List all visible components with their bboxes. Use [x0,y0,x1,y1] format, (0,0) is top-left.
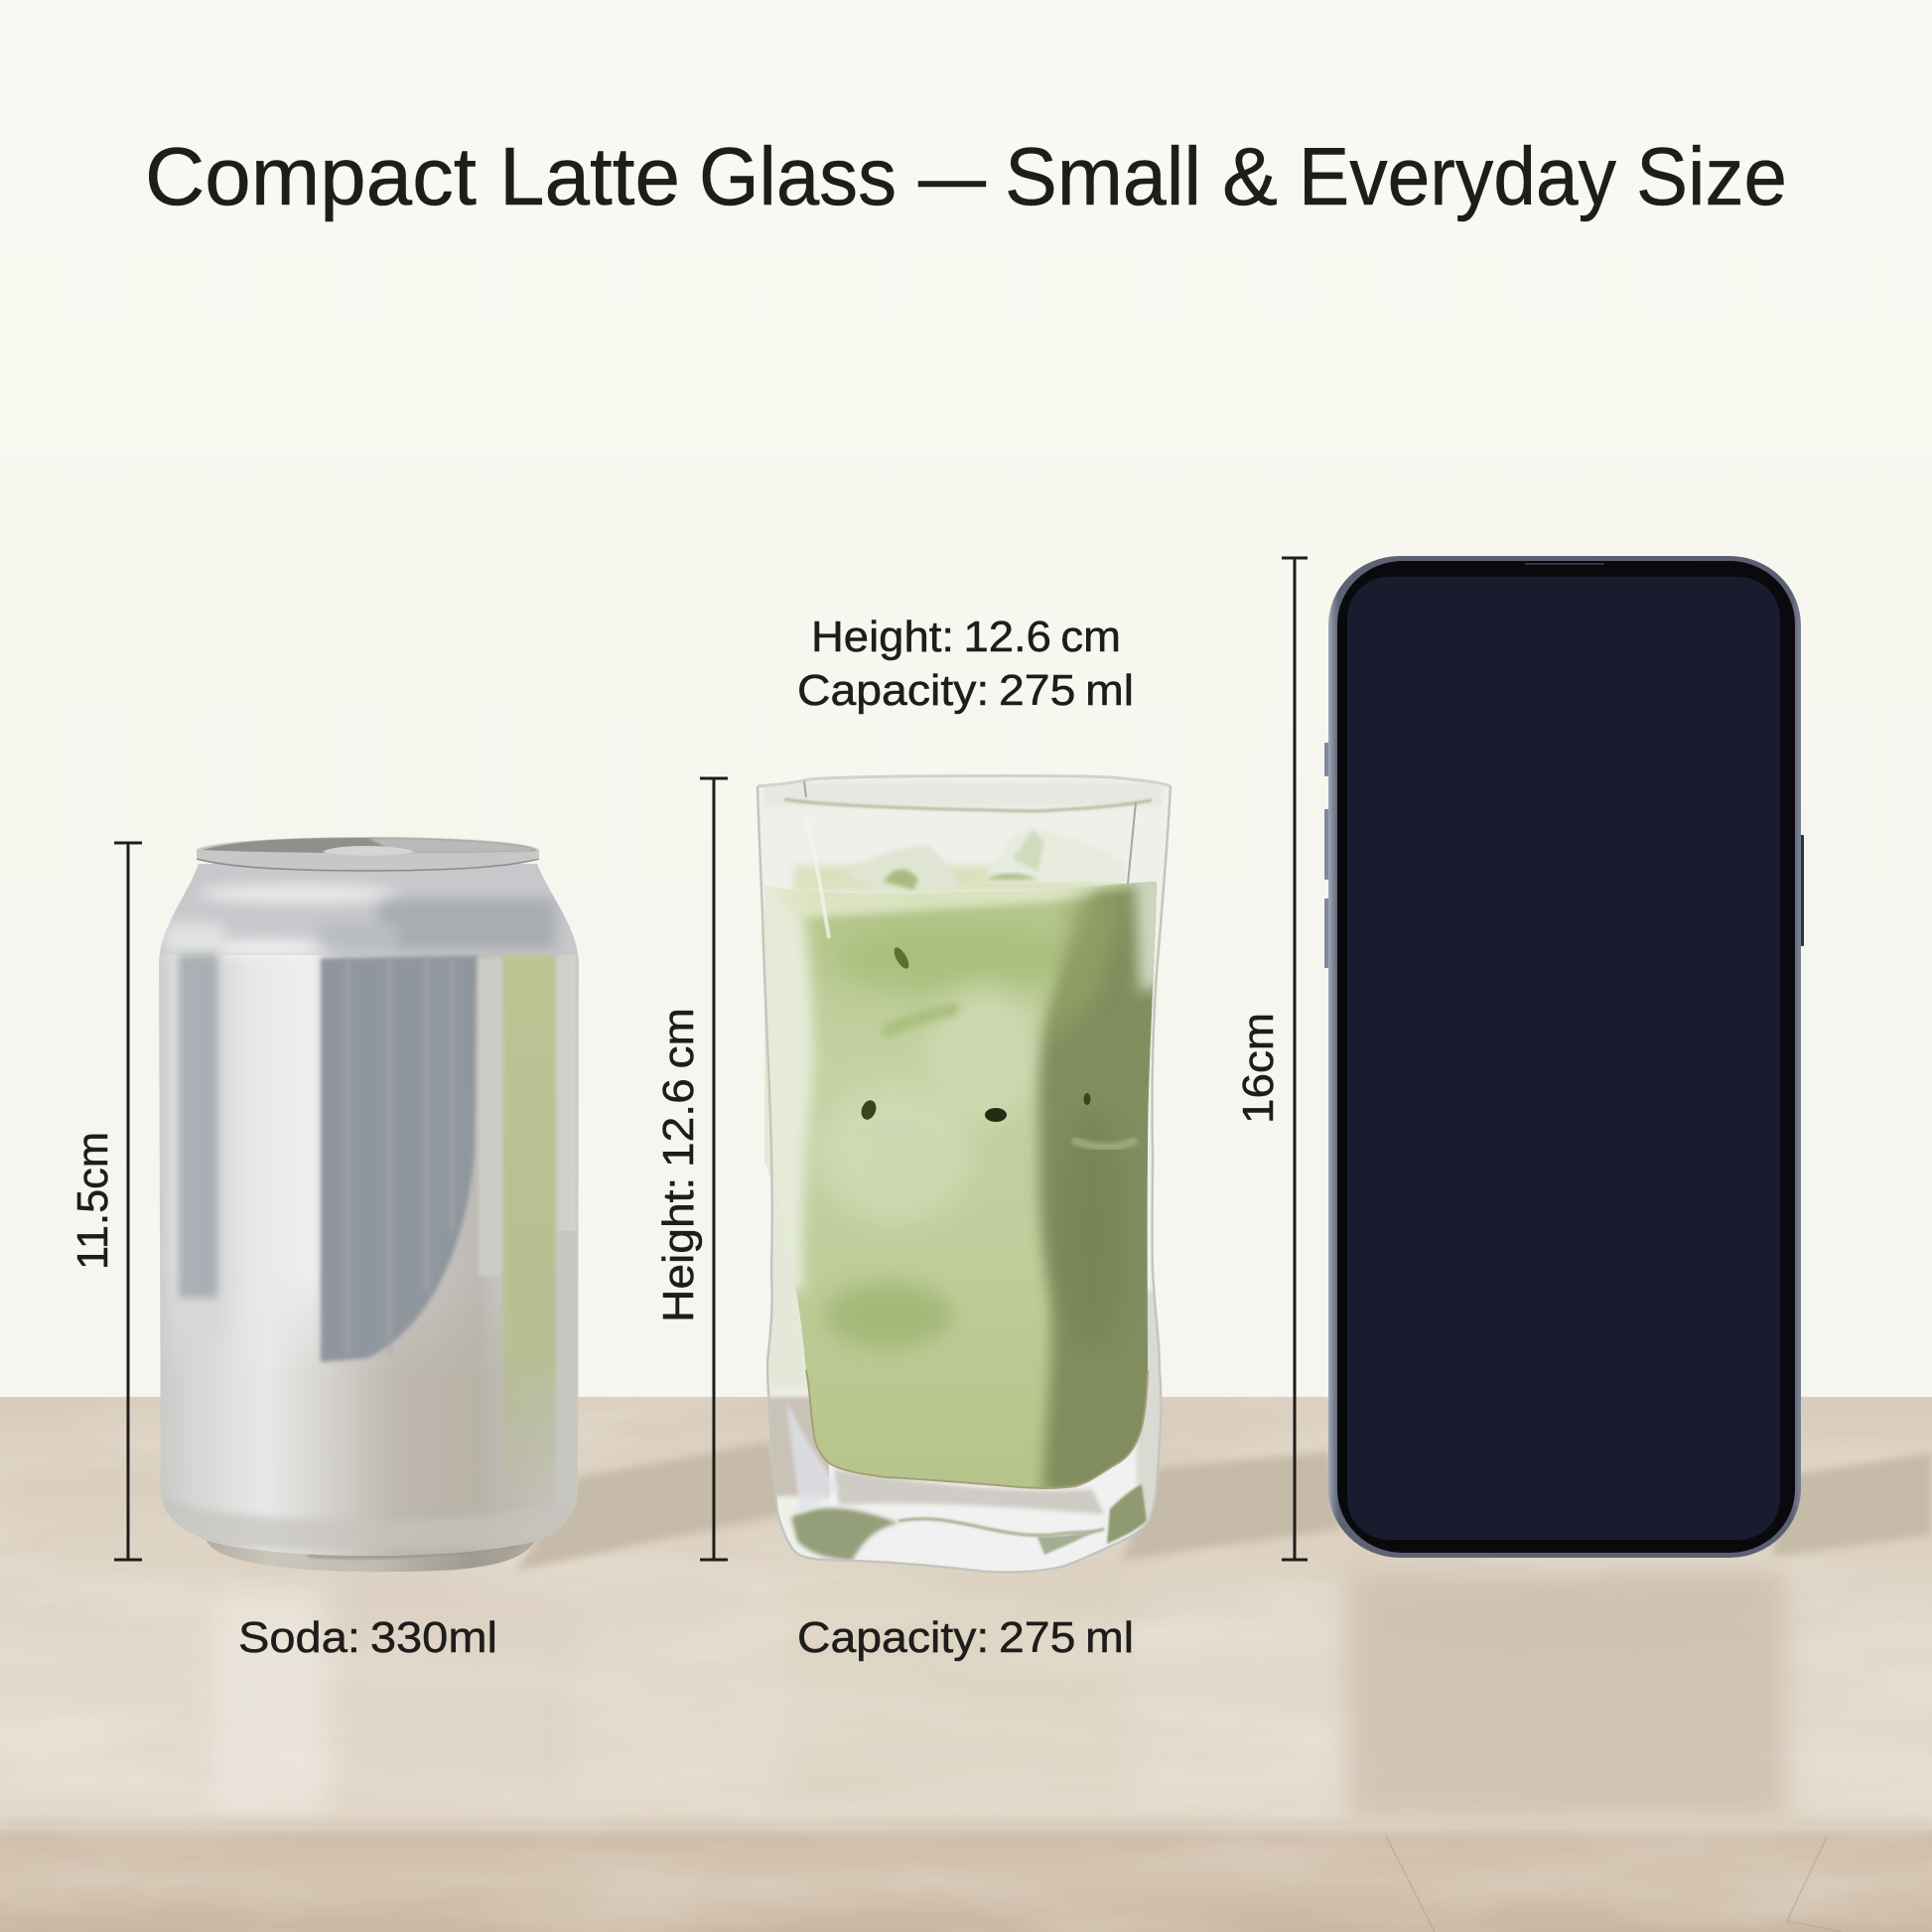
label: soda volume: Soda: 330ml [238,1613,497,1662]
cast shadow: glass [1122,1452,1340,1561]
base green refraction [791,1508,898,1561]
cast shadow: can [516,1442,788,1571]
phone bezel [1337,561,1795,1553]
title: Size [1636,130,1787,222]
table front edge [0,1819,1932,1932]
phone speaker [1525,563,1604,565]
left milky glass wall [768,1188,808,1390]
green lower left [824,1282,953,1349]
title: Compact [145,130,477,222]
title [145,130,1787,222]
label: glass capacity: Capacity: 275 ml [797,1613,1134,1662]
glass: matcha latte glass [750,769,1176,1584]
cast shadow: phone [1772,1452,1932,1557]
can lower warm tone [161,1305,520,1556]
ice cube right [983,827,1124,884]
title: — [918,130,986,222]
can: soda can [154,837,586,1572]
reflection: green drink [503,955,556,1521]
title: & [1222,130,1278,222]
green swirl top [829,922,1077,994]
glass rim [758,775,1171,786]
dimension line: phone height [1282,558,1308,1560]
dimension label: phone height: 16cm [1234,1013,1283,1124]
table surface [0,1397,1932,1830]
base bright [829,1463,836,1499]
phone screen [1347,577,1780,1540]
right glass pillar [1137,1291,1167,1519]
dimension label: glass height: Height: 12.6 cm [654,1008,703,1322]
glass shell [750,769,1176,1584]
reflection: left dark strip [179,955,217,1298]
wall background [0,0,1932,1397]
milky left band [755,874,813,1291]
label: glass height and capacity: Capacity: 275 ml [797,666,1134,715]
streak on dark side [1072,1140,1137,1148]
reflection: side column [478,958,498,1276]
can shoulder [154,859,586,955]
dimension line: can height [114,843,142,1560]
can base [205,1537,538,1572]
dimension line: glass height [700,778,728,1560]
glass outline edge [758,786,1171,1573]
label: glass height and capacity [797,613,1134,715]
pale milk mid [814,1082,973,1221]
left glass pillar [770,1395,829,1498]
ice cube left [844,846,965,894]
title: Glass [699,130,897,222]
dimension label: can height: 11.5cm [69,1132,117,1270]
title: Small [1005,130,1201,222]
title: Latte [499,130,680,222]
reflection: dark phone [321,956,477,1362]
label: glass height and capacity: Height: 12.6 cm [811,613,1121,661]
matcha liquid [755,869,1167,1494]
phone side buttons [1324,743,1804,968]
matcha specks [892,945,911,971]
dark right region [1038,879,1162,1494]
title: Everyday [1299,130,1616,222]
phone frame [1328,556,1801,1558]
milk top band [764,869,1162,918]
can lid [197,837,539,872]
object reflections on table [213,1569,1785,1817]
phone [1324,556,1804,1558]
base gray band [834,1469,1104,1514]
milk line above liquid [794,866,1122,892]
can body [154,854,586,1569]
liquid bottom line [806,1370,1148,1488]
